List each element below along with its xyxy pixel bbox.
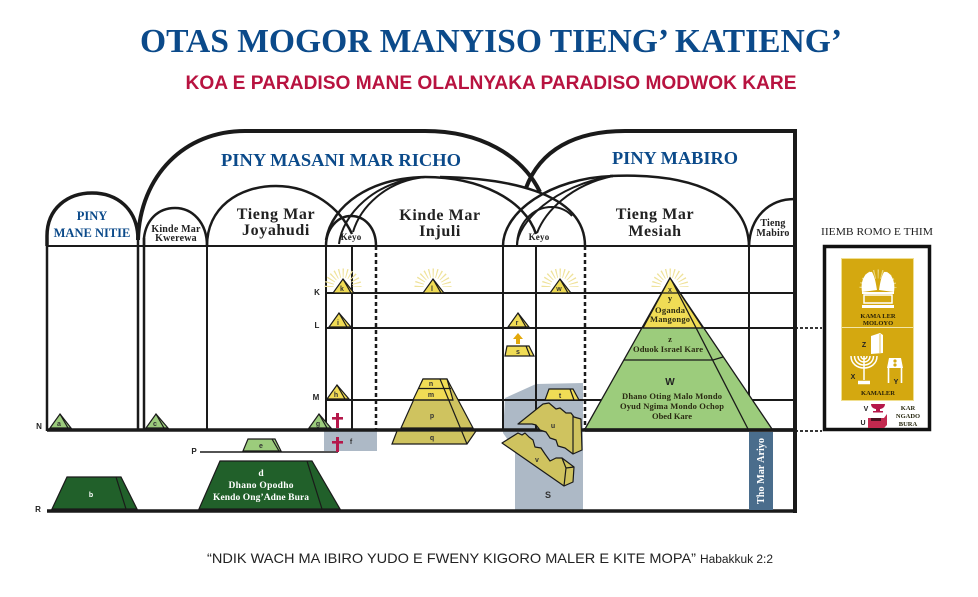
arch: Kinde Mar Kwerewa [144, 208, 207, 246]
arch: big Piny Masani Mar Richo [138, 131, 540, 240]
arch: Tieng Mabiro [749, 199, 795, 246]
label: Kinde Mar Injuli [399, 207, 481, 240]
small pyramids [50, 273, 579, 509]
chart frame: arches and dispensation lines [47, 129, 795, 513]
broken stone v: v [535, 457, 539, 464]
arches: Kinde Mar Injuli [326, 177, 536, 240]
arch: Tieng Mar Mesiah [610, 176, 749, 246]
vertical lines [47, 236, 144, 431]
sunburst pyramid k: k [340, 286, 344, 293]
gold holy place panels [842, 258, 914, 400]
plane N over pyramid [585, 428, 795, 432]
label S: S [545, 490, 551, 500]
pyramid i: i [337, 320, 339, 327]
pyramid e: e [259, 443, 263, 450]
icon: showbread [862, 333, 883, 354]
large pyramid: Tieng Mar Mesiah: Mangongo [650, 314, 690, 324]
group: Piny Mabiro heading: PINY MABIRO [612, 148, 738, 168]
plane labels: M [313, 393, 320, 402]
label: Kama Ler Moloyo: MOLOYO [863, 320, 893, 327]
label: Piny Mane Nitie: MANE NITIE [54, 226, 130, 240]
large pyramid: Tieng Mar Mesiah: z [668, 334, 672, 344]
pyramid g: g [316, 421, 320, 428]
group: Piny Masani heading: PINY MASANI MAR RICHO [221, 150, 461, 170]
crosses [332, 413, 343, 452]
pyramid s: s [516, 349, 520, 356]
plane labels: L [315, 321, 320, 330]
pyramid d: Dhano Opodho [228, 481, 294, 491]
dashed connectors to legend [795, 328, 822, 431]
bar: Tho Mar Ariyo: Tho Mar Ariyo [756, 438, 767, 504]
label f: f [350, 439, 353, 446]
pyramid e [243, 439, 281, 451]
label: Kar Ngado Bura: KAR [901, 405, 916, 412]
label: Kar Ngado Bura [896, 405, 920, 428]
right wall [793, 129, 797, 513]
arch: Piny Mane Nitie [47, 193, 138, 246]
grey region: f [324, 431, 377, 451]
pyramid h: h [334, 392, 338, 399]
broken stone v [502, 433, 574, 486]
label: Piny Mane Nitie [54, 209, 130, 240]
pyramid: Injuli n m p q: p [430, 413, 434, 420]
sunburst pyramid k [329, 273, 357, 293]
pyramid c: c [153, 421, 157, 428]
arch: first Keyo [326, 216, 376, 246]
horizontal lines [47, 245, 795, 247]
pyramid: Injuli n m p q: q [430, 435, 434, 442]
grey region: S [503, 383, 583, 510]
arch: Tieng Mar Joyahudi [207, 186, 352, 246]
label: Tieng Mar Joyahudi: Joyahudi [242, 222, 310, 239]
pyramid: Injuli n m p q: n [429, 381, 433, 388]
large pyramid: Tieng Mar Mesiah: Dhano Oting Malo Mondo [622, 391, 722, 401]
label: Tieng Mar Mesiah [616, 206, 694, 240]
pyramid r [508, 313, 529, 327]
pyramid d: d [258, 469, 264, 479]
bar: Tho Mar Ariyo [749, 432, 773, 510]
pyramid s [505, 346, 534, 356]
large pyramid: Tieng Mar Mesiah [585, 273, 772, 429]
large pyramid: Tieng Mar Mesiah: Oganda [655, 305, 686, 315]
label: Keyo 1: Keyo [341, 232, 362, 242]
label: Tieng Mar Mesiah: Mesiah [628, 223, 682, 240]
plane labels: N [36, 422, 42, 431]
sunburst pyramid w [546, 273, 574, 293]
plane labels: R [35, 505, 41, 514]
label: Tieng Mar Mesiah: Tieng Mar [616, 206, 694, 223]
label: Kinde Mar Injuli: Injuli [419, 223, 461, 240]
pyramid: Injuli n m p q: m [428, 392, 434, 399]
plane labels: K [314, 288, 320, 297]
icon: table [887, 358, 903, 386]
icon: menorah: X [851, 374, 856, 381]
icon: ark of covenant [862, 272, 894, 308]
quote: “NDIK WACH MA IBIRO YUDO E FWENY KIGORO MALER E KITE MOPA” [207, 550, 696, 566]
large pyramid: Tieng Mar Mesiah: x [668, 287, 672, 294]
sunburst pyramid l: l [431, 286, 433, 293]
sunburst pyramid l [419, 273, 447, 293]
pyramid b [52, 477, 137, 509]
large pyramid: Tieng Mar Mesiah: Obed Kare [652, 411, 692, 421]
label: Kinde Mar Kwerewa: Kwerewa [155, 233, 197, 244]
large pyramid: Tieng Mar Mesiah: y [668, 293, 673, 303]
broken stone u [518, 403, 582, 454]
quote: Habakkuk 2:2 [700, 554, 773, 566]
pyramid a: a [57, 421, 61, 428]
label: Tieng Mabiro: Tieng [760, 218, 786, 229]
arch: Piny Mabiro [526, 131, 795, 188]
large pyramid: Tieng Mar Mesiah: W [665, 377, 675, 388]
icon: menorah [851, 356, 877, 382]
label: Keyo 2: Keyo [529, 232, 550, 242]
label: Kinde Mar Kwerewa: Kinde Mar [151, 224, 201, 235]
icon: altar box [860, 414, 887, 428]
arrow: s up to r [513, 333, 523, 344]
icon: laver bowl: V [864, 406, 869, 413]
legend panel: temple [824, 246, 930, 430]
label: Tieng Mar Joyahudi: Tieng Mar [237, 206, 315, 223]
label: Kamaler: KAMALER [861, 390, 895, 397]
pyramid d: Kendo Ong’Adne Bura [213, 493, 309, 503]
icon: table: Y [894, 379, 899, 386]
subtitle: KOA E PARADISO MANE OLALNYAKA PARADISO MODWOK KARE [186, 73, 796, 94]
pyramid d [199, 461, 340, 509]
label: Piny Mane Nitie: PINY [77, 209, 107, 223]
icon: altar box: U [860, 420, 866, 427]
plane labels [35, 288, 320, 514]
pyramid a [50, 414, 71, 428]
pyramid c [146, 414, 168, 428]
label: Tieng Mabiro [756, 218, 790, 239]
pyramid h [327, 385, 349, 399]
legend heading: IIEMB ROMO E THIM [821, 227, 934, 238]
label: Kama Ler Moloyo: KAMA LER [860, 313, 896, 320]
plane labels: P [191, 447, 197, 456]
large pyramid: Tieng Mar Mesiah: Oduok Israel Kare [633, 344, 703, 354]
label: Kinde Mar Kwerewa [151, 224, 201, 244]
title: OTAS MOGOR MANYISO TIENG’ KATIENG’ [140, 23, 842, 60]
label: Tieng Mar Joyahudi [237, 206, 315, 239]
label: Kama Ler Moloyo [860, 313, 896, 327]
sunburst pyramid w: w [555, 286, 562, 293]
broken stone u: u [551, 423, 555, 430]
icon: showbread: Z [862, 342, 867, 349]
label: Kar Ngado Bura: NGADO [896, 413, 920, 420]
pyramid b: b [89, 492, 93, 499]
label: Kinde Mar Injuli: Kinde Mar [399, 207, 481, 224]
plane lines N, P, R [47, 430, 795, 511]
pyramid t: t [559, 393, 562, 400]
large pyramid: Tieng Mar Mesiah: Oyud Ngima Mondo Ochop [620, 401, 724, 411]
pyramid i [329, 313, 351, 327]
icon: laver bowl [864, 404, 885, 413]
label: Tieng Mabiro: Mabiro [756, 228, 790, 239]
pyramid r: r [516, 320, 519, 327]
arches: second Keyo [503, 176, 613, 246]
pyramid g [309, 414, 331, 428]
pyramid: Injuli n m p q [392, 379, 476, 444]
label: Kar Ngado Bura: BURA [899, 421, 918, 428]
pyramid t [545, 389, 579, 400]
